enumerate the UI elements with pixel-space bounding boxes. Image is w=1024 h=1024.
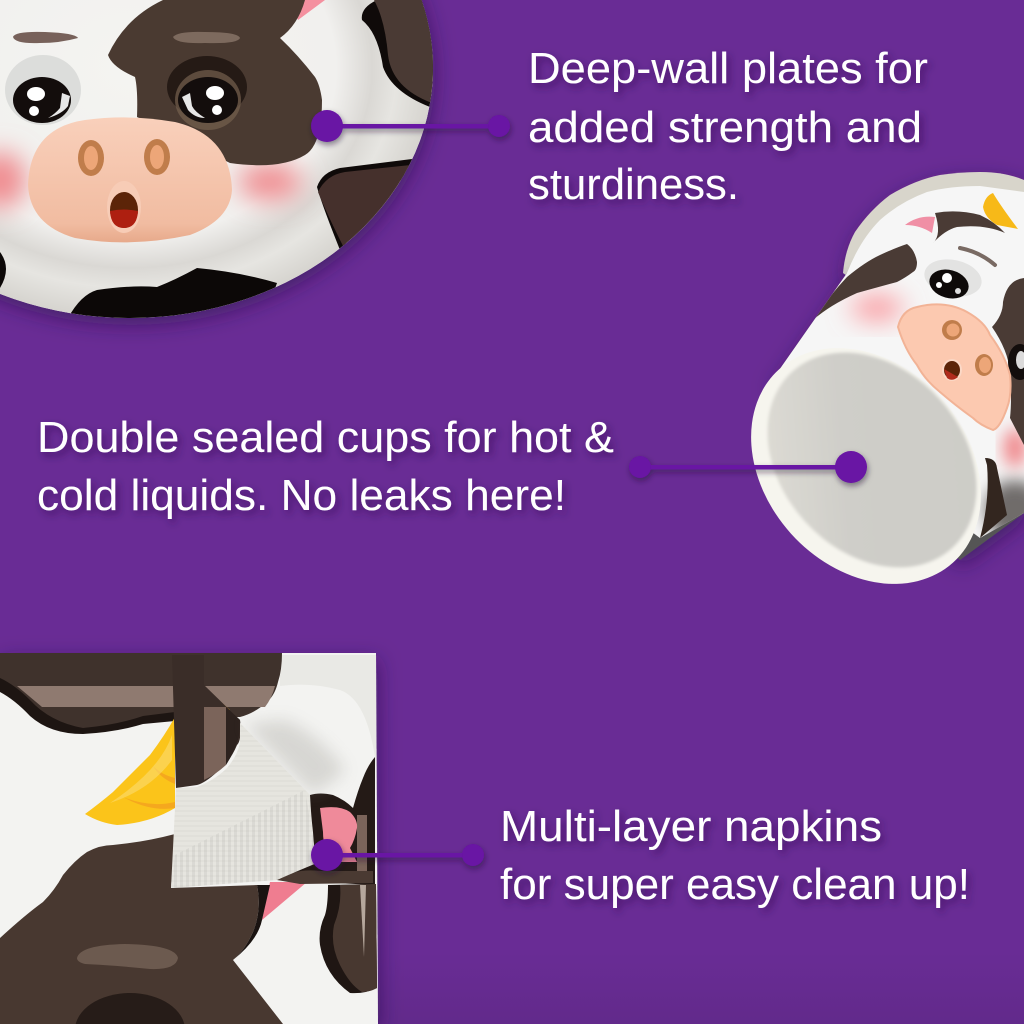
callout text: napkins: for super easy clean up! (500, 860, 970, 909)
cup left dark patch (813, 244, 917, 320)
arrow: plate connector (311, 110, 510, 142)
napkin tan stripe (17, 686, 275, 707)
plate lower right rim patch (317, 158, 420, 250)
napkin fold shadow (244, 720, 345, 794)
napkin vertical folded strip (172, 686, 240, 788)
callout text: cups: cold liquids. No leaks here! (37, 471, 566, 520)
arrow: napkin connector (311, 839, 484, 871)
napkin lower pink (262, 882, 307, 920)
napkin fold flap (171, 723, 317, 888)
cup base inner (725, 311, 1019, 609)
plate left patch (0, 252, 6, 288)
panel: napkin photo (0, 653, 378, 1024)
napkin pink ear (320, 807, 357, 862)
callout text: cups: Double sealed cups for hot & (37, 413, 614, 462)
napkin brown band (277, 870, 373, 884)
napkin yellow horn (85, 717, 175, 825)
cup brow patch (933, 211, 1005, 243)
plate bottom patch (70, 268, 277, 318)
cup lower dark patch (980, 458, 1007, 538)
napkin lower dark patch (0, 834, 283, 1024)
callout text: plates: Deep-wall plates for (528, 44, 928, 93)
callout text: napkins (500, 802, 970, 909)
callout text: plates: added strength and (528, 103, 922, 152)
cup snout (898, 304, 1011, 430)
plate centre dark patch (108, 0, 322, 165)
plate pink ear (298, 0, 325, 20)
napkin band edge (0, 678, 175, 734)
cup lower cheek (1003, 428, 1024, 468)
cup body (780, 186, 1024, 538)
arrow: cup connector (629, 451, 867, 483)
cup ear (905, 217, 935, 233)
cup brow (960, 248, 995, 265)
napkin right dark area (277, 757, 375, 885)
cup base rim (704, 302, 1024, 630)
cup cheek (851, 297, 903, 319)
panel: cup photo (751, 169, 1024, 584)
plate brows (13, 32, 240, 43)
cup horn (983, 193, 1018, 229)
napkin faint top right tint (280, 655, 376, 765)
napkin small horn (223, 704, 230, 710)
panel: plate photo (0, 0, 440, 330)
plate right eye (167, 56, 247, 130)
plate snout (28, 117, 232, 242)
cup right eye (1008, 344, 1024, 380)
napkin brow (77, 944, 178, 969)
napkin top dark band (0, 653, 282, 733)
cup lower shading (985, 480, 1024, 540)
callout text: plates: sturdiness. (528, 160, 739, 209)
napkin bottom dark circle (75, 993, 185, 1024)
callout text: plates (528, 44, 928, 209)
napkin lower right blob (320, 884, 377, 993)
callout text: napkins: Multi-layer napkins (500, 802, 882, 851)
plate cheeks (0, 152, 302, 208)
napkin lower edge (233, 885, 270, 960)
cup eye (924, 260, 982, 298)
napkin right tan strip (357, 815, 367, 875)
plate left eye (5, 55, 81, 125)
callout text: cups (37, 413, 614, 520)
plate upper right rim patch (362, 0, 440, 107)
cup rim (843, 172, 1024, 300)
cup right dark patch (992, 278, 1024, 445)
